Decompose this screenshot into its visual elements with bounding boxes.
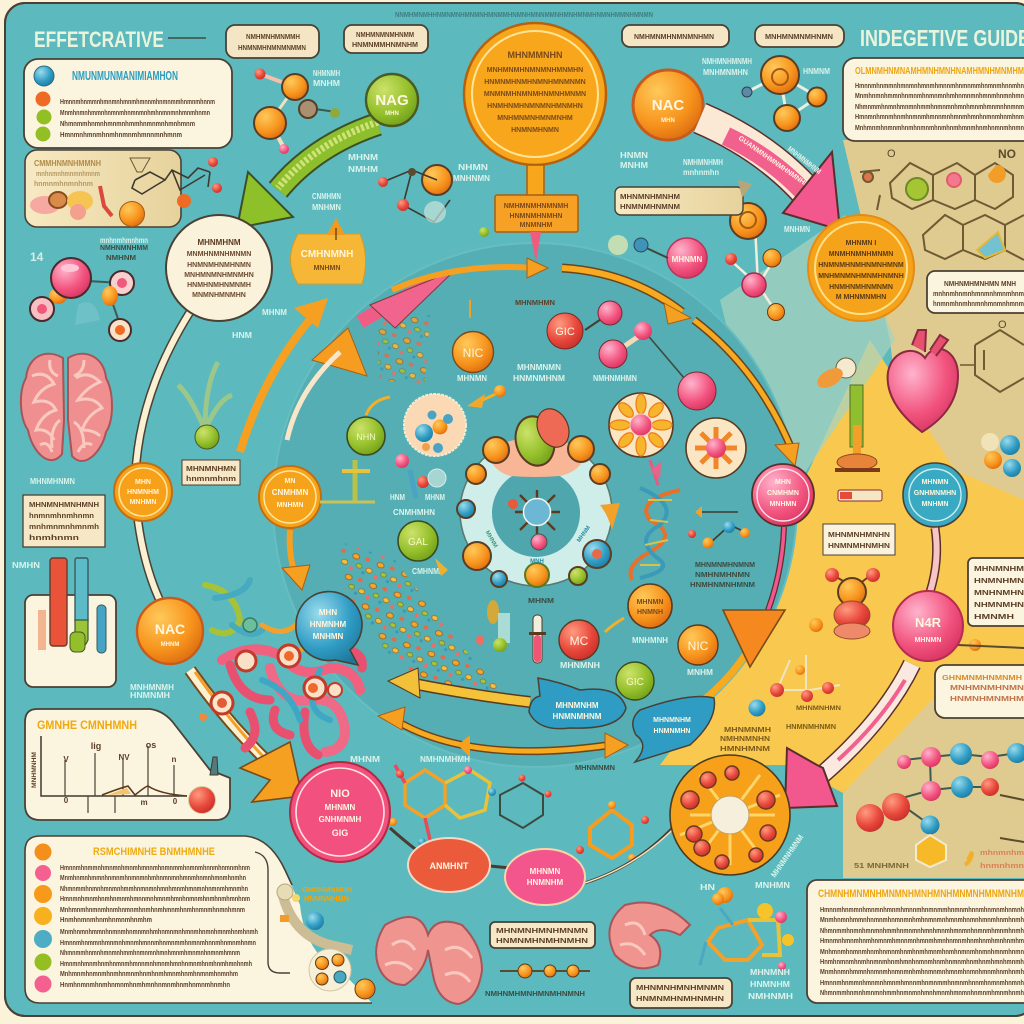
icon: bottom left snail and balls: GMNHMNMHN bbox=[302, 887, 352, 894]
label cluster upper left: MNHM bbox=[313, 79, 340, 88]
structure labels bbox=[887, 147, 1016, 161]
arrow: pink curved with label bbox=[700, 118, 840, 230]
icon: lower right bead molecule: 51 MNHMNH bbox=[854, 863, 909, 870]
icon: right molecule pink orange bbox=[725, 203, 810, 320]
node: right orange text circle: HNMHNMHNMNMN bbox=[829, 284, 893, 291]
panel: bottom left list: Nhmnmmhnmnhmnmnhmmhnmnmnhmnhmnmhmnmnhnmnmhmnmhn bbox=[60, 884, 248, 893]
box: center bottom labels: MHNMNHMNHMNMN bbox=[636, 983, 724, 992]
icon: brain bbox=[21, 354, 112, 486]
node: pink ring circle: CNMHMN bbox=[767, 490, 799, 497]
node: pink ring circle: MNHMN bbox=[770, 501, 796, 508]
panel: top orange circle: MNMNMHNMNMHNMNHMNMN bbox=[484, 91, 586, 98]
node: right orange text circle: MHNMN I bbox=[846, 240, 876, 247]
arrow: pink pointer and big orange triangle bbox=[287, 270, 455, 440]
node: pink N4R circle bbox=[893, 528, 963, 661]
chart: small line chart panel: GMNHE CMNHMNH bbox=[37, 718, 137, 732]
scattered particle field bbox=[335, 315, 500, 695]
icon: right orange and blue molecule bbox=[688, 506, 755, 589]
panel: mechanism legend: Hmnmnhmnmhnmhnmnmhmnnmnhmnm bbox=[60, 130, 182, 139]
icon: cell cluster: MHNM bbox=[425, 493, 445, 502]
label cluster upper left: NMHNMNHMM bbox=[100, 245, 148, 252]
box: right note bbox=[927, 271, 1024, 313]
icon: colourful hexagon molecule: NMHNMH bbox=[748, 992, 793, 1001]
node: orange left circle: HNMNHM bbox=[127, 489, 159, 496]
icon: heart bbox=[888, 330, 975, 432]
bubble: blue speech left bbox=[296, 592, 362, 665]
node: green NAC: NAG bbox=[375, 92, 409, 109]
node chain: NAC and pink beads: MHNMNMN bbox=[517, 363, 561, 372]
icon: brain: MHNMHNMN bbox=[30, 477, 75, 486]
node: pink N4R circle: N4R bbox=[915, 615, 942, 630]
panel: bottom right text bbox=[807, 880, 1024, 1003]
icon: red molecule with labels: HMNHMNM bbox=[720, 746, 770, 753]
box: left note bbox=[12, 495, 105, 570]
icon: test tube center bbox=[476, 600, 546, 663]
lower molecules center bbox=[389, 755, 649, 862]
icon: orange stacked flask bbox=[825, 568, 880, 639]
icon: cell cluster bbox=[390, 394, 466, 517]
node: blue text circle: MHNMN bbox=[922, 479, 948, 486]
icon: flower sun 1 bbox=[609, 393, 673, 485]
icon: lower right bead molecule: mhnmnhm bbox=[980, 850, 1024, 857]
panel: bottom left list: Mnhmnmhnmnmhnmhnmnmhnmhnmhmnmhnmhnmnmhnmnhmnm bbox=[60, 905, 245, 914]
node: cream text circle with band: MNHMNMNHMNMHN bbox=[184, 272, 254, 279]
node: right orange text circle bbox=[808, 215, 914, 321]
icon: bottom left snail and balls: HNMNMHMN bbox=[304, 896, 349, 903]
box: left note: mnhmnmnhmnmh bbox=[29, 522, 99, 531]
icon: molecule upper right bbox=[702, 56, 830, 176]
icon: bottom left snail and balls bbox=[277, 884, 375, 999]
icon: molecule upper right: MNHMNMHNM bbox=[786, 144, 823, 176]
node: orange ring circle bbox=[259, 466, 321, 590]
icon: small dumbbell cluster top center: HNMN bbox=[620, 151, 648, 160]
connector: bottom curve and pills: HNMNHM bbox=[527, 878, 564, 887]
icon: DNA helix bbox=[630, 488, 680, 580]
icon: small dumbbell cluster top center bbox=[608, 151, 668, 258]
diagram: central ring: MHNM bbox=[528, 598, 554, 605]
box: right mid notes: HMNMH bbox=[974, 612, 1014, 621]
node: green NAC bbox=[366, 74, 418, 126]
box: right mid notes bbox=[935, 558, 1024, 718]
panel: top orange circle: MHNMMNHN bbox=[508, 50, 562, 60]
node: orange NAC chain center bottom: MNHMNH bbox=[632, 636, 668, 645]
icon: small dumbbell cluster top center: MNHM bbox=[620, 161, 648, 170]
chart: small line chart panel: lig bbox=[91, 741, 101, 751]
bubble: blue cloud center bbox=[529, 678, 626, 729]
box: left note: NMHN bbox=[12, 561, 40, 570]
icon: kidney left bbox=[376, 917, 482, 1004]
panel: bottom left list: Mnmhnmnhmmnhnmnmhnmnmnhmhnmnmnhmnmhnmnhmnmhnmhn bbox=[60, 873, 246, 882]
icon: hexagon right of heart: O bbox=[998, 319, 1007, 331]
node: right orange text circle: MNHMNMNHMNMHNMNH bbox=[818, 273, 904, 280]
panel: top orange circle: HNMNMHNMHNMNHMNMNMN bbox=[484, 79, 586, 86]
panel: top orange circle: MNHMNMHNMNMNHMNMHN bbox=[487, 67, 583, 74]
label cluster upper left: NHMNMH bbox=[313, 69, 340, 78]
chart: small line chart panel: n bbox=[172, 755, 177, 764]
arrow: inner right arcs bbox=[562, 268, 799, 466]
node: green GAL circle: GAL bbox=[408, 537, 428, 548]
node: blue text circle bbox=[903, 463, 967, 527]
panel: test tubes bbox=[25, 558, 116, 687]
chart: small line chart panel: m bbox=[140, 798, 148, 807]
label cluster upper left: MNHMN bbox=[312, 203, 341, 212]
box: right mid notes: GHNMNMHNMNMH bbox=[942, 675, 1022, 682]
box: right mid notes: MNHMNMHNMN bbox=[950, 685, 1024, 692]
node: orange NAC chain center bottom: HNMNH bbox=[637, 609, 663, 616]
icon: colourful hexagon molecule: HNMNHM bbox=[750, 980, 790, 989]
label cluster upper left: mnhnmhmnhmn bbox=[100, 236, 148, 245]
top chips bbox=[226, 25, 844, 58]
node chain: NAC and pink beads bbox=[452, 298, 716, 410]
chart: small line chart panel: V bbox=[63, 755, 69, 764]
icon: right orange and blue molecule: HNMHNMNHMNM bbox=[690, 582, 755, 589]
panel: tan molecule note bbox=[25, 150, 181, 227]
node: orange NAC left: NAC bbox=[155, 621, 185, 637]
node: orange left circle bbox=[114, 463, 172, 521]
node: right orange text circle: M MHNMNMHN bbox=[836, 294, 886, 301]
label cluster top center left bbox=[348, 153, 490, 237]
panel: bottom left list: Hnmhnmnmhnmhnmnmhnmhmnhnmnmhnmhnmnmhnmhn bbox=[60, 980, 230, 989]
label cluster upper left bbox=[30, 69, 341, 264]
icon: molecule upper left bbox=[254, 68, 340, 154]
icon: plant sprout bbox=[178, 362, 240, 485]
badge: gold label: CMHNMNH bbox=[301, 249, 353, 260]
chart: small line chart panel bbox=[25, 709, 230, 820]
structure labels: O bbox=[887, 148, 896, 160]
icon: lower right bead molecule bbox=[854, 743, 1024, 870]
node: cream text circle with band: HNMHNMHNMNMH bbox=[187, 282, 251, 289]
icon: plant sprout: MHNMNHMN bbox=[186, 464, 236, 473]
node: orange ring circle: MN bbox=[285, 478, 295, 485]
node: orange left circle: MHN bbox=[135, 479, 151, 486]
node: green GAL circle bbox=[398, 521, 448, 576]
node: pink bottom large circle: GIG bbox=[332, 828, 348, 838]
arrow: left upward orange bbox=[232, 298, 328, 452]
connector: stem and box: NMHMNMHNMNMH bbox=[504, 203, 568, 210]
note and node: pink cluster top right: MHNMN bbox=[672, 255, 703, 264]
icon: red molecule with labels: MHNMNHMN bbox=[796, 706, 841, 712]
node: cream text circle with band: HNMNMHNMHNMN bbox=[187, 262, 251, 269]
panel: mechanism legend bbox=[24, 59, 232, 148]
icon: protein swirl: MHNM bbox=[350, 755, 380, 764]
connector: stem and box bbox=[495, 165, 578, 262]
box: right mid notes: MNHNMHN bbox=[974, 588, 1024, 597]
icon: red molecule with labels: HNMNMHNMN bbox=[786, 724, 836, 731]
icon: protein swirl bbox=[199, 580, 380, 764]
node: blue text circle: MNHMN bbox=[922, 501, 948, 508]
icon: pink molecule left bbox=[30, 258, 134, 341]
icon: kidney right bbox=[609, 902, 690, 968]
box: center bottom labels: HNMNMHNMHNMHN bbox=[496, 936, 588, 945]
chart: small line chart panel: 0 bbox=[173, 797, 178, 806]
icon: ball chain bottom bbox=[500, 964, 590, 978]
node: pink bottom large circle: MHNMN bbox=[325, 803, 356, 812]
top chips: NMHMNHMNMMH bbox=[246, 32, 300, 41]
panel: top orange circle: HNMHNMHNMNMNHMNMHN bbox=[487, 103, 583, 110]
node: pink bottom large circle bbox=[290, 762, 390, 862]
icon: yellow pin arrow bbox=[467, 385, 506, 408]
bubble: blue speech left: MHN bbox=[319, 608, 337, 617]
node: green circle bbox=[347, 397, 390, 455]
label cluster top center left: NMHM bbox=[348, 165, 378, 174]
arrow: orange lower left bbox=[130, 670, 302, 802]
note and node: pink cluster top right: mnhnmhn bbox=[683, 168, 719, 177]
node: orange NAC chain center bottom: MC bbox=[570, 634, 589, 648]
note and node: pink cluster top right bbox=[615, 158, 752, 278]
node: right orange text circle: HNMNMHNMHNMNHMNM bbox=[818, 262, 904, 269]
label cluster upper left: CNMHMN bbox=[312, 192, 341, 201]
icon: colourful hexagon molecule: MHNMNH bbox=[750, 968, 790, 977]
panel: bottom left list: Hmnmnhmnmhnmhnmnmhmnnmnhmnmhmnhnmnmhnmhnmhmnhnmh bbox=[60, 959, 252, 968]
box: middle right note bbox=[823, 524, 895, 555]
icon: cell cluster: CNMHMHN bbox=[393, 508, 435, 517]
icon: right molecule pink orange: MNHMN bbox=[784, 225, 810, 234]
box: right mid notes: NHMNMHN bbox=[974, 600, 1024, 609]
icon: red molecule with labels: MHNMNMH bbox=[724, 727, 771, 734]
icon: colourful hexagon molecule bbox=[700, 881, 794, 1001]
connector: stem and box: MNMNHM bbox=[520, 222, 552, 229]
bubble: blue right bbox=[633, 696, 714, 762]
panel: top orange circle: HNMNMHNMN bbox=[511, 127, 559, 134]
icon: hexagon ring structures bbox=[860, 163, 1024, 260]
box: left note: MHNMNHMNHMNH bbox=[29, 500, 99, 509]
bubble: blue right: HNMNMHN bbox=[654, 728, 690, 735]
node: cream text circle with band: MNMHNMNHMNMN bbox=[187, 251, 251, 258]
arrow: left upward orange: MHNM bbox=[262, 308, 287, 317]
panel: bottom left list: Hmnnmhnmmnhmnmnhmnmhmnnmhnmnmmhnmnmhnnmhnmnmhnmn bbox=[60, 938, 256, 947]
node: pink ring circle: MHN bbox=[775, 479, 791, 486]
node: pink ring circle bbox=[752, 464, 814, 526]
icon: cell cluster: HNM bbox=[390, 493, 405, 502]
node: orange NAC bbox=[633, 70, 703, 140]
icon: red molecule with labels bbox=[720, 618, 841, 753]
node chain: NAC and pink beads: HNMNMHNM bbox=[513, 374, 565, 383]
node: pink bottom large circle: GNHMNMH bbox=[319, 815, 362, 824]
icon: right orange and blue molecule: NMHNMHNMN bbox=[695, 572, 750, 579]
icon: hexagon chain molecule bbox=[130, 157, 222, 208]
node: green GAL circle: CMHNMN bbox=[412, 567, 444, 576]
diagram: central ring bbox=[457, 404, 620, 605]
node: pink bottom large circle: NIO bbox=[330, 788, 350, 800]
icon: red molecule with labels: NMHNMNHN bbox=[720, 736, 770, 743]
node: blue text circle: GNHMNMHN bbox=[914, 490, 956, 497]
label cluster top center left: MHNM bbox=[348, 153, 378, 162]
box: center bottom labels: NMHNMHMNHMNMHNMNH bbox=[485, 991, 585, 998]
arrow: pink curved with label: GUANMNHMNMHNMNHMN bbox=[737, 135, 815, 193]
top chips: NMHMNMNMHNMM bbox=[356, 30, 414, 39]
icon: colourful hexagon molecule: HN bbox=[700, 883, 715, 892]
node: orange NAC chain center bottom: MNHM bbox=[687, 668, 713, 677]
badge: gold label bbox=[290, 218, 366, 284]
panel: mechanism legend: Nhmnmmhnmnhmnmnhmmhnmnmnhmnhmnm bbox=[60, 119, 195, 128]
icon: flask and balls right bbox=[814, 358, 1021, 501]
arrow: pink lower right bbox=[785, 664, 912, 808]
diagram: central ring: MNH bbox=[530, 559, 544, 565]
top chips: HNMNMMHNMNHM bbox=[352, 40, 418, 49]
panel: mechanism legend: NMUNMUNMANIMIAMHON bbox=[72, 68, 178, 83]
label cluster top center left: NHMN bbox=[458, 163, 488, 172]
panel: bottom left list: Mnmhnmnhmmnhnmnmhnmnmnhmhnmnmnhmnmhnmnhmnmhnmhnmh bbox=[60, 927, 258, 936]
node chain: NAC and pink beads: NMHNMHMN bbox=[593, 374, 637, 383]
node: orange NAC chain center bottom bbox=[559, 584, 718, 700]
node: orange NAC left bbox=[137, 598, 203, 664]
label cluster top center left: MNHNMN bbox=[453, 174, 490, 183]
box: right mid notes: HNMNHMN bbox=[974, 576, 1024, 585]
box: left note: hnmhnmn bbox=[29, 533, 80, 542]
chart: small line chart panel: NV bbox=[118, 753, 130, 762]
node: orange NAC left: MHNM bbox=[161, 642, 179, 648]
panel: bottom left list: Hmnnmhnmmnhmnmnhmnmhmnnmhnmnmmhnmnmhnnmhnmnmhnm bbox=[60, 863, 250, 872]
icon: molecule upper right: NMHMNHMNMH bbox=[702, 57, 752, 66]
panel: mechanism legend: Mnmhnmnhmmnhnmnmhnmnmnhmhnmnmnhmnmhnmn bbox=[60, 108, 210, 117]
node chain: NAC and pink beads: NIC bbox=[463, 346, 484, 360]
node: orange NAC chain center bottom: NIC bbox=[688, 639, 709, 653]
box: center bottom labels bbox=[485, 922, 732, 1008]
panel: bottom left list: Hmnmnhmnmhnmhnmnmhmnnmnhmnmhmnhnmnmhnmhnmhmnhnm bbox=[60, 894, 250, 903]
icon: hexagon right of heart bbox=[975, 319, 1024, 392]
node: cream text circle with band bbox=[135, 215, 272, 620]
node: cream text circle with band: MHNMHNM bbox=[197, 238, 241, 247]
box: right note: NMHNMHMNHMN MNH bbox=[944, 279, 1016, 288]
node chain: NAC and pink beads: MHNMN bbox=[457, 374, 487, 383]
box: right mid notes: MHNMNHM bbox=[974, 564, 1024, 573]
label cluster upper left: 14 bbox=[30, 250, 44, 264]
chart: small line chart panel: os bbox=[146, 740, 156, 750]
central darker disc bbox=[273, 243, 797, 767]
diagram: central ring: MHNM bbox=[576, 525, 592, 544]
chart: small line chart panel: 0 bbox=[64, 796, 69, 805]
lower molecules center: NMHNMHMH bbox=[420, 755, 470, 764]
note and node: pink cluster top right: MHNMNHMNHM bbox=[620, 192, 680, 201]
box: middle right note: MHNMNHMNHN bbox=[828, 530, 890, 539]
panel: top orange circle bbox=[464, 23, 606, 165]
bubble: blue cloud center: HNMNMHNM bbox=[553, 712, 602, 721]
node: green circle: NHN bbox=[356, 432, 376, 442]
icon: molecule upper right: MNHMNMHN bbox=[703, 68, 748, 77]
icon: plant sprout: hnmnmhnm bbox=[186, 474, 236, 483]
box: left note: hnmnmhnmhnmn bbox=[29, 511, 94, 520]
lower molecules center: MHNMNMN bbox=[575, 765, 615, 772]
title: left: EFFETCRATIVE bbox=[34, 27, 164, 52]
bubble: blue cloud center: MHNMNHM bbox=[555, 701, 599, 710]
panel: top orange circle: MNHMNMNHMNMNHM bbox=[497, 115, 573, 122]
panel: tan molecule note: CMMHNMNHMMNH bbox=[34, 159, 101, 168]
icon: right orange and blue molecule: MHNMNMHNMNM bbox=[695, 562, 755, 569]
connector: bottom curve and pills: MHNMN bbox=[530, 867, 561, 876]
box: center bottom labels: HNMNMHNMHNMHN bbox=[636, 994, 724, 1003]
node: orange NAC chain center bottom: GIC bbox=[626, 677, 644, 688]
icon: flower sun 2 bbox=[686, 418, 746, 478]
arrow: pink line to triangle bbox=[660, 527, 785, 728]
arrow: orange lower left: HNMNMH bbox=[130, 691, 170, 700]
chart: small line chart panel: MNHMNHM bbox=[32, 752, 38, 788]
node: cream text circle with band: MNMNHMNMHN bbox=[192, 292, 246, 299]
panel: tan molecule note: mnhnmnhmnmnhmnm bbox=[36, 171, 100, 178]
node: pink N4R circle: MHNMN bbox=[915, 637, 941, 644]
arrow: left upward orange: HNM bbox=[232, 331, 252, 340]
connector: bottom curve and pills: ANMHNT bbox=[430, 861, 469, 871]
bubble: blue speech left: HNMNHM bbox=[310, 620, 347, 629]
node: green NAC: MHN bbox=[385, 111, 399, 117]
rotated label near sun: MHNMNHMNM bbox=[769, 833, 805, 879]
icon: yellow post bbox=[320, 460, 375, 503]
top chips: MNHMNMNMHNMN bbox=[765, 32, 833, 41]
icon: colourful hexagon molecule: MNHMN bbox=[755, 881, 790, 890]
top caption: NNMHMNMHHNMNMNHMNMNHMNMMHNMNHMNNMMNHMNHMNMHNMNHMMNHMNMN bbox=[395, 12, 653, 19]
top chips: NMHMNMHNMNMNHMN bbox=[634, 32, 714, 41]
panel: mechanism legend: Hmnnmhnmmnhmnmnhmnmhmnnmhnmnmmhnmnmhnnm bbox=[60, 97, 215, 106]
icon: orange sun circle bbox=[670, 755, 790, 875]
icon: lower right bead molecule: hnmnhmn bbox=[980, 863, 1024, 870]
structure labels: NO bbox=[998, 147, 1016, 161]
node: orange ring circle: MNHMN bbox=[277, 502, 303, 509]
top chips: HNMNMHNMNMNMMN bbox=[238, 43, 306, 52]
node chain: NAC and pink beads: MHNMHMN bbox=[515, 298, 555, 307]
panel: right top text bbox=[843, 58, 1024, 141]
arrow: orange lower left: MNHMNMH bbox=[130, 683, 174, 692]
panel: bottom left list: RSMCHIMNHE BNMHMNHE bbox=[93, 846, 215, 858]
node: right orange text circle: MNMHNMNHMNMN bbox=[829, 251, 893, 258]
badge: gold label: MNHMN bbox=[314, 265, 340, 272]
node: orange NAC: MHN bbox=[661, 118, 675, 124]
box: center bottom labels: MHNMNHMNHMNMN bbox=[496, 926, 588, 935]
arrow: green curved bbox=[237, 122, 378, 228]
panel: bottom left list: Nhmnmmhnmnhmnmnhmmhnmnmnhmnhmnmhmnmnhnmnmhmnm bbox=[60, 948, 240, 957]
node: orange NAC chain center bottom: MHNMN bbox=[637, 599, 663, 606]
bubble: blue speech left: MNHMN bbox=[313, 632, 344, 641]
node: orange NAC: NAC bbox=[652, 97, 684, 114]
note and node: pink cluster top right: NMHMNHMH bbox=[683, 158, 723, 167]
icon: molecule upper right: HNMNM bbox=[803, 67, 830, 76]
node chain: NAC and pink beads: GIC bbox=[555, 326, 575, 338]
box: middle right note: HNMNMHNMHN bbox=[828, 541, 890, 550]
node: orange left circle: MNHMN bbox=[130, 499, 156, 506]
arrow: inner top orange arc bbox=[392, 258, 548, 318]
node: orange ring circle: CNMHMN bbox=[272, 488, 308, 497]
diagram: central ring: MHNM bbox=[484, 530, 498, 549]
node: orange NAC chain center bottom: MHNMNH bbox=[560, 661, 600, 670]
panel: bottom left list bbox=[25, 836, 372, 1003]
note and node: pink cluster top right: HNMNMHNMNM bbox=[620, 202, 680, 211]
panel: bottom left list: Mnhmnmhnmnmhnmhnmnmhnmhnmhmnmhnmhnmnmhnmnhm bbox=[60, 969, 238, 978]
box: right mid notes: HNMNHMNMHM bbox=[950, 696, 1024, 703]
panel: tan molecule note: hnmnmhnmnhnm bbox=[34, 181, 93, 188]
connector: stem and box: HNMNMHNMHN bbox=[510, 213, 562, 220]
connector: bottom curve and pills bbox=[390, 820, 680, 905]
panel: bottom left list: Hnmhnmnmhnmhnmnmhnmhm bbox=[60, 915, 152, 924]
arrow: inner bottom arcs bbox=[378, 668, 628, 758]
label cluster upper left: NMHNM bbox=[106, 255, 136, 262]
bubble: blue right: MHNMNHM bbox=[653, 717, 691, 724]
